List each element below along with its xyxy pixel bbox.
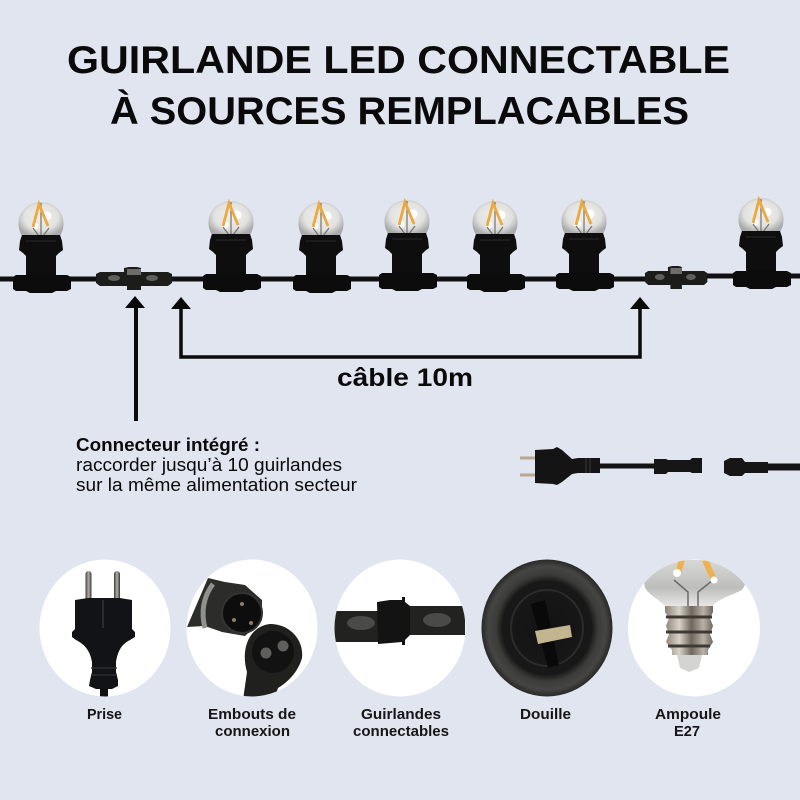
bulb 4 [379,200,437,291]
arrow: connector [134,305,138,421]
circle: plug [40,560,170,697]
title: À SOURCES REMPLACABLES [110,89,689,133]
labels under circles: Embouts de [208,706,296,723]
circle: E27 bulb [628,560,760,696]
bulb 5 [467,201,525,292]
bulb 7 [733,198,791,289]
title: GUIRLANDE LED CONNECTABLE [67,39,730,82]
arrow head: connector [125,296,145,308]
cable [0,276,800,279]
bulb 1 [13,202,71,293]
labels under circles: connexion [215,723,290,740]
labels under circles: E27 [674,723,700,740]
labels under circles: Prise [87,706,122,723]
bulb 6 [556,200,614,291]
cable length label: câble 10m [337,364,473,392]
circle: connectable string [334,560,466,696]
bracket arrow: cable length [171,297,650,357]
connector right [645,266,707,289]
circle: socket [482,560,612,696]
title [67,39,730,133]
labels under circles: Douille [520,706,571,723]
connector left [96,267,172,290]
connector description [76,435,357,495]
bulb 2 [203,201,261,292]
string light cable with bulbs and connectors [0,198,800,293]
labels under circles [87,706,721,740]
connector description: sur la même alimentation secteur [76,475,357,495]
connector description: Connecteur intégré : [76,435,260,455]
labels under circles: connectables [353,723,449,740]
circle: connection ends [186,560,318,700]
labels under circles: Guirlandes [361,706,441,723]
bulb 3 [293,202,351,293]
power plug and cable [520,447,800,485]
labels under circles: Ampoule [655,706,721,723]
connector description: raccorder jusqu’à 10 guirlandes [76,455,342,475]
